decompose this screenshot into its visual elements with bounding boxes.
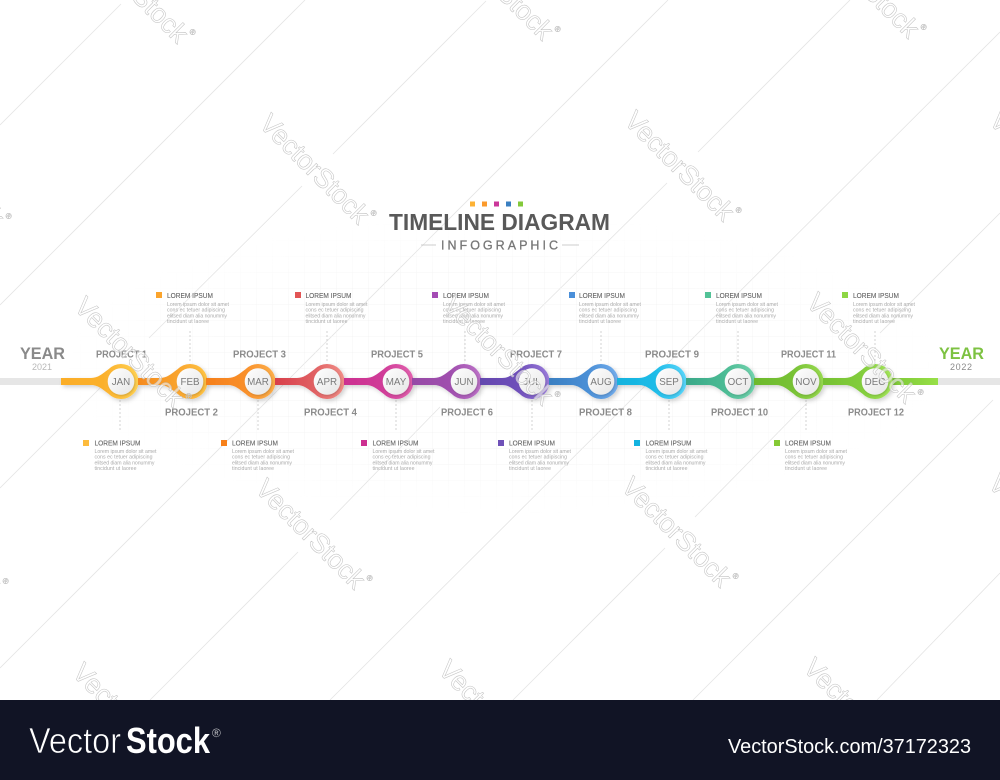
footer logo: Vector <box>29 720 121 761</box>
info block: APR: elitsed diam alia nonummy <box>306 313 366 319</box>
info block: JUL: cons ec tetuer adipiscing <box>509 455 567 461</box>
project labels: PROJECT 10 <box>711 408 768 418</box>
project labels: PROJECT 5 <box>371 350 423 360</box>
node: FEB: FEB <box>180 377 200 388</box>
info block: OCT: LOREM IPSUM <box>716 293 762 300</box>
watermarks: ® <box>918 22 929 32</box>
year 2021 marker: 2021 <box>32 362 52 372</box>
info block: NOV: elitsed diam alia nonummy <box>785 460 845 466</box>
info block: NOV <box>774 440 848 472</box>
info block: SEP: tincidunt ut laoree <box>646 466 688 472</box>
node: SEP <box>617 364 687 399</box>
watermarks: ® <box>552 389 563 399</box>
info block: MAY: cons ec tetuer adipiscing <box>372 455 431 461</box>
info block: JAN: Lorem ipsum dolor sit amet <box>94 449 157 455</box>
info block: AUG: tincidunt ut laoree <box>579 319 621 325</box>
project labels: PROJECT 7 <box>510 350 562 360</box>
node: AUG <box>549 364 619 399</box>
info block: FEB: Lorem ipsum dolor sit amet <box>167 302 230 308</box>
info block: JUN: tincidunt ut laoree <box>443 319 485 325</box>
watermarks: VectorStock <box>254 108 376 230</box>
info block: MAY: tincidunt ut laoree <box>372 466 415 472</box>
watermarks: ® <box>3 211 14 221</box>
info block: NOV: tincidunt ut laoree <box>785 466 827 472</box>
subtitle: INFOGRAPHIC <box>441 238 558 252</box>
node: MAR <box>206 364 276 399</box>
watermarks: VectorStock <box>250 473 372 595</box>
footer url: VectorStock.com/37172323 <box>728 736 971 758</box>
info block: MAR: elitsed diam alia nonummy <box>232 460 292 466</box>
project labels: PROJECT 6 <box>441 408 493 418</box>
watermarks: ® <box>733 205 744 215</box>
node: MAR: MAR <box>247 377 269 388</box>
project labels: PROJECT 4 <box>304 408 357 418</box>
info block: FEB: tincidunt ut laoree <box>167 319 209 325</box>
info block: MAR: cons ec tetuer adipiscing <box>232 455 290 461</box>
info block: JAN: tincidunt ut laoree <box>94 466 137 472</box>
node: JUL: JUL <box>523 377 541 388</box>
node: AUG: AUG <box>590 377 612 388</box>
info block: OCT: elitsed diam alia nonummy <box>716 313 776 319</box>
info block: JUN: elitsed diam alia nonummy <box>443 313 503 319</box>
year 2021 marker: YEAR <box>20 344 65 363</box>
watermarks: VectorStock <box>438 289 560 411</box>
info block: JUN: LOREM IPSUM <box>443 293 489 300</box>
info block: DEC: Lorem ipsum dolor sit amet <box>853 302 916 308</box>
info block: JAN <box>83 440 157 472</box>
info block: APR: Lorem ipsum dolor sit amet <box>306 302 368 308</box>
info block: MAR: LOREM IPSUM <box>232 440 278 448</box>
year 2021 marker <box>20 344 65 372</box>
node: APR: APR <box>317 377 337 388</box>
info block: JUN: Lorem ipsum dolor sit amet <box>443 302 506 308</box>
info block: AUG <box>569 292 642 325</box>
node: DEC: DEC <box>865 377 885 388</box>
info block: OCT: Lorem ipsum dolor sit amet <box>716 302 779 308</box>
info block: JUL <box>498 440 572 472</box>
info block: OCT: cons ec tetuer adipiscing <box>716 308 774 314</box>
watermarks: ® <box>183 391 194 401</box>
info block: JUL: Lorem ipsum dolor sit amet <box>509 449 572 455</box>
subtitle rules <box>421 244 579 246</box>
connector dashes <box>120 331 875 432</box>
info block: FEB <box>156 292 230 325</box>
info block: JAN: LOREM IPSUM <box>94 440 141 448</box>
node: MAY <box>344 364 414 399</box>
info block: JUL: elitsed diam alia nonummy <box>509 460 569 466</box>
info block: AUG: elitsed diam alia nonummy <box>579 313 639 319</box>
watermarks: ® <box>364 573 375 583</box>
info block: AUG: LOREM IPSUM <box>579 293 625 300</box>
node: JUN: JUN <box>454 377 474 388</box>
info block: NOV: cons ec tetuer adipiscing <box>785 455 843 461</box>
info block: FEB: elitsed diam alia nonummy <box>167 313 227 319</box>
node: DEC <box>823 364 893 399</box>
faint grid backdrop <box>176 256 806 465</box>
watermarks: ® <box>0 576 11 586</box>
node: OCT <box>686 364 756 399</box>
project labels <box>96 350 904 418</box>
title: TIMELINE DIAGRAM <box>389 209 610 235</box>
title block <box>389 202 610 252</box>
info block: SEP: Lorem ipsum dolor sit amet <box>646 449 708 455</box>
info block: FEB: LOREM IPSUM <box>167 293 213 300</box>
info block: MAY: Lorem ipsum dolor sit amet <box>372 449 435 455</box>
year 2022 marker: 2022 <box>950 362 972 372</box>
project labels: PROJECT 2 <box>165 408 218 418</box>
info block: MAR: Lorem ipsum dolor sit amet <box>232 449 295 455</box>
watermarks: VectorStock <box>616 471 738 593</box>
footer logo: Stock <box>126 720 211 761</box>
footer logo <box>29 720 211 761</box>
watermarks: ® <box>552 24 563 34</box>
info block: NOV: LOREM IPSUM <box>785 440 831 448</box>
node: JAN: JAN <box>112 377 130 388</box>
info block: AUG: Lorem ipsum dolor sit amet <box>579 302 642 308</box>
info block: JAN: elitsed diam alia nonummy <box>94 460 155 466</box>
end band of timeline <box>890 378 938 385</box>
info block: MAY: elitsed diam alia nonummy <box>372 460 433 466</box>
node: MAY: MAY <box>386 377 407 388</box>
node: NOV <box>754 364 824 399</box>
node: JAN <box>61 364 139 399</box>
info block: SEP: cons ec tetuer adipiscing <box>646 455 704 461</box>
watermarks: VectorStock <box>69 291 191 413</box>
watermarks: VectorStock <box>67 657 189 779</box>
project labels: PROJECT 9 <box>645 350 699 360</box>
node: NOV: NOV <box>795 377 817 388</box>
watermarks: VectorStock <box>433 654 555 776</box>
info block: MAR: tincidunt ut laoree <box>232 466 274 472</box>
node: FEB <box>138 364 208 399</box>
timeline base rail <box>0 378 1000 385</box>
project labels: PROJECT 8 <box>579 408 632 418</box>
info block: SEP <box>634 440 708 472</box>
node: SEP: SEP <box>659 377 679 388</box>
watermarks: ® <box>368 208 379 218</box>
node: JUL <box>480 364 550 399</box>
project labels: PROJECT 12 <box>848 408 904 418</box>
info block: MAY: LOREM IPSUM <box>372 440 419 448</box>
info block: OCT: tincidunt ut laoree <box>716 319 758 325</box>
info block: APR: LOREM IPSUM <box>306 293 352 300</box>
watermarks: ® <box>915 387 926 397</box>
node: OCT: OCT <box>728 377 748 388</box>
year 2022 marker <box>939 344 984 372</box>
info block: APR: cons ec tetuer adipiscing <box>306 308 364 314</box>
title colour dots <box>470 202 523 206</box>
info block: DEC <box>842 292 916 325</box>
info block: DEC: tincidunt ut laoree <box>853 319 895 325</box>
info block: JUL: LOREM IPSUM <box>509 440 555 448</box>
info block: MAR <box>221 440 295 472</box>
info block: DEC: cons ec tetuer adipiscing <box>853 308 911 314</box>
info block: DEC: LOREM IPSUM <box>853 293 899 300</box>
info block: JUL: tincidunt ut laoree <box>509 466 551 472</box>
watermarks: ® <box>187 27 198 37</box>
watermarks: VectorStock <box>801 287 923 409</box>
info block: JUN: cons ec tetuer adipiscing <box>443 308 501 314</box>
info block: SEP: elitsed diam alia nonummy <box>646 460 706 466</box>
info block: SEP: LOREM IPSUM <box>646 440 692 448</box>
year 2022 marker: YEAR <box>939 344 984 363</box>
node: JUN <box>412 364 482 399</box>
watermarks: ® <box>730 571 741 581</box>
info block: MAY <box>361 440 435 472</box>
footer bar <box>0 700 1000 780</box>
info block: APR: tincidunt ut laoree <box>306 319 348 325</box>
info block: DEC: elitsed diam alia nonummy <box>853 313 913 319</box>
node: APR <box>275 364 345 399</box>
info block: NOV: Lorem ipsum dolor sit amet <box>785 449 848 455</box>
info block: AUG: cons ec tetuer adipiscing <box>579 308 637 314</box>
watermarks: VectorStock <box>619 105 741 227</box>
info block: JAN: cons ec tetuer adipiscing <box>94 455 153 461</box>
info block: FEB: cons ec tetuer adipiscing <box>167 308 225 314</box>
project labels: PROJECT 11 <box>781 350 836 360</box>
info block: OCT <box>705 292 779 325</box>
footer registered mark: ® <box>212 726 221 740</box>
info block: APR <box>295 292 368 325</box>
project labels: PROJECT 3 <box>233 350 286 360</box>
project labels: PROJECT 1 <box>96 350 147 360</box>
info block: JUN <box>432 292 506 325</box>
watermarks: VectorStock <box>798 652 920 774</box>
